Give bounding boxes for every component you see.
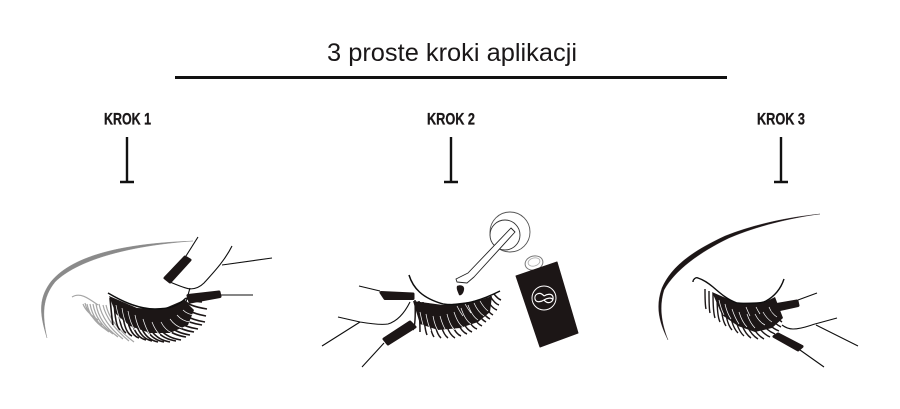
glue bottle [516, 254, 578, 347]
glue brush [456, 212, 530, 295]
tweezers [782, 293, 858, 367]
illustration: step 2 lash with tweezers and glue [322, 212, 578, 367]
upper lash line [108, 293, 186, 309]
title underline [175, 76, 727, 79]
illustration: step 1 eye with tweezers [41, 237, 272, 342]
lash mass [109, 296, 194, 333]
title: 3 proste kroki aplikacji [327, 39, 577, 67]
illustration: step 3 finished lash [659, 214, 858, 367]
step 2 label: KROK 2 [427, 110, 475, 128]
step 2 pointer [444, 137, 458, 182]
tweezers [170, 237, 272, 302]
step 3 label: KROK 3 [757, 110, 805, 128]
tweezers [322, 286, 410, 367]
step 1 pointer [120, 137, 134, 182]
upper lash line [693, 278, 784, 304]
faded inner lashes [72, 295, 134, 342]
lash mass [413, 296, 492, 330]
step 3 pointer [774, 137, 788, 182]
step 1 label: KROK 1 [104, 110, 151, 128]
lash mass [712, 292, 783, 332]
eyebrow [41, 241, 193, 338]
eyebrow [659, 214, 820, 340]
upper lash line [409, 275, 500, 305]
